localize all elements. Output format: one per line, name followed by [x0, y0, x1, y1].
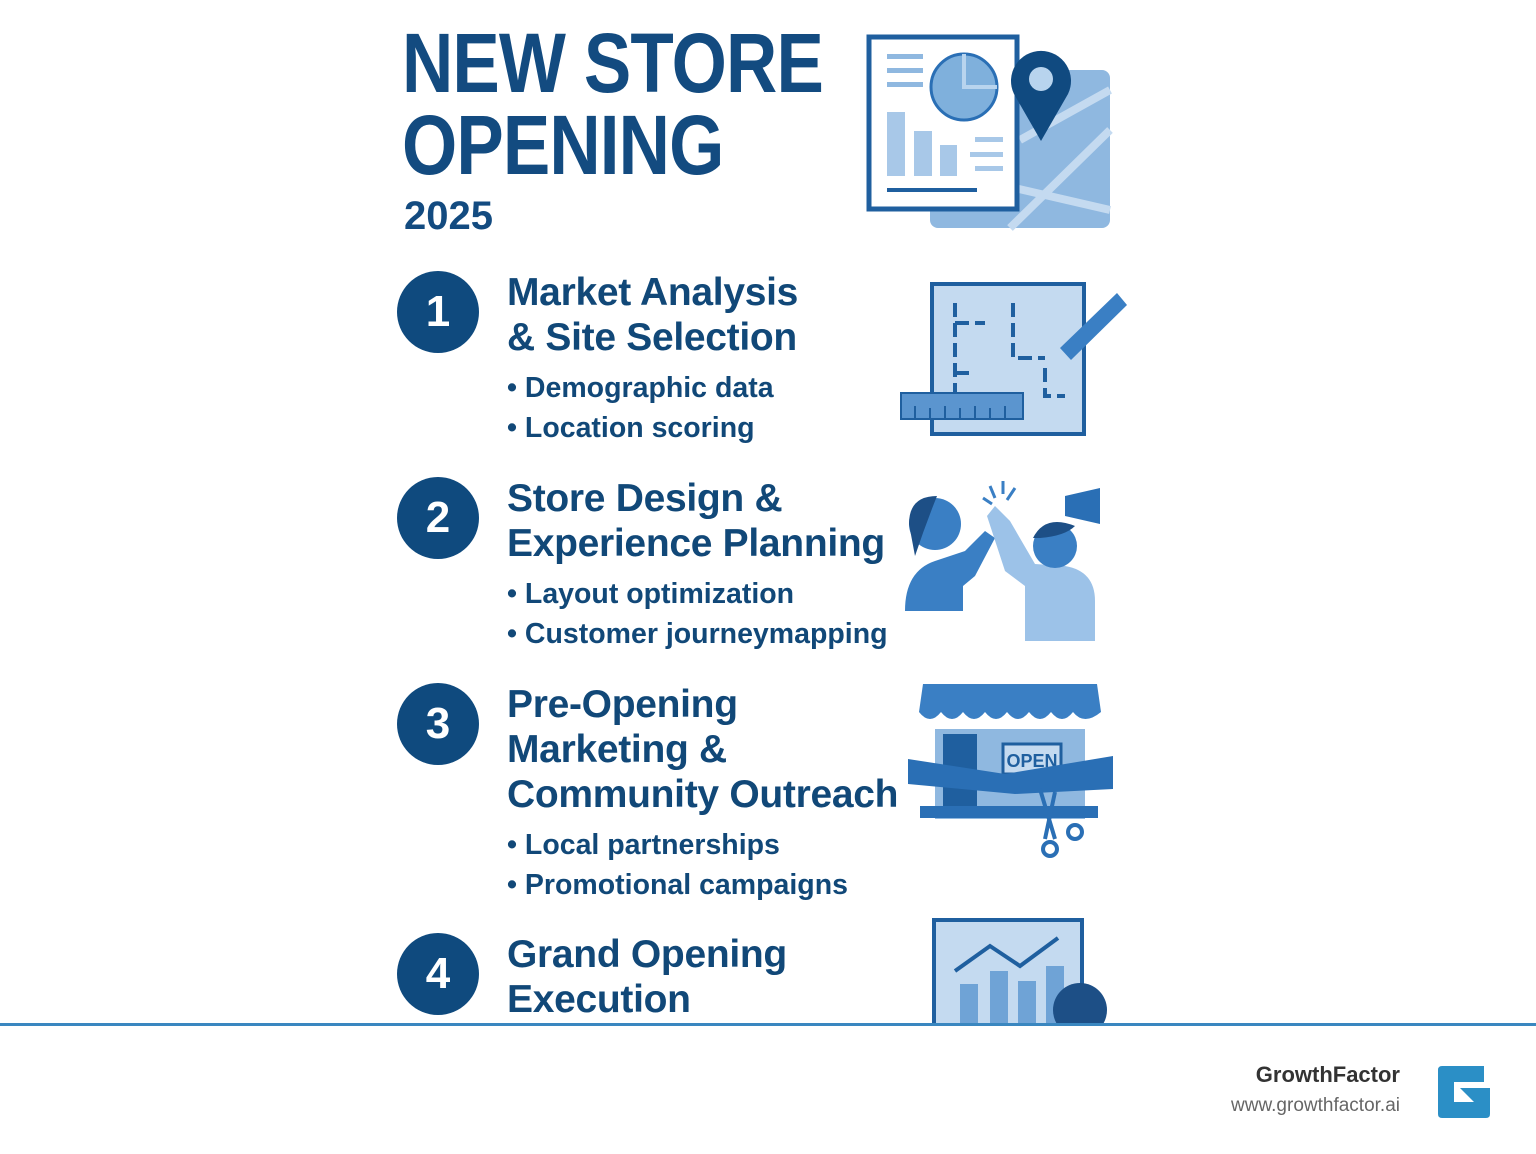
number badge 3 [397, 683, 479, 765]
step 1 [397, 271, 1127, 444]
icon: open store: OPEN [1006, 751, 1058, 771]
title: OPENING [402, 98, 723, 192]
number badge 1 [397, 271, 479, 353]
step 3 [397, 683, 1113, 901]
logo G [1438, 1066, 1490, 1118]
title [402, 16, 823, 192]
footer brand: GrowthFactor [1256, 1062, 1400, 1087]
icon: report and map [866, 34, 1113, 231]
step 1 text: Market Analysis [507, 271, 798, 314]
number badge 1: 1 [426, 287, 450, 336]
footer brand: www.growthfactor.ai [1231, 1095, 1400, 1116]
step 3 text: Promotional campaigns [525, 869, 848, 901]
step 1 text: & Site Selection [507, 316, 797, 359]
footer brand [1231, 1062, 1400, 1116]
step 4 text [507, 933, 787, 1021]
step 3 text [507, 683, 898, 901]
icon: high five [905, 481, 1100, 641]
step 2 text: Layout optimization [525, 578, 794, 610]
step 2 text [507, 477, 888, 650]
step 2 text: Store Design & [507, 477, 782, 520]
number badge 2 [397, 477, 479, 559]
title: NEW STORE [402, 16, 823, 110]
number badge 2: 2 [426, 493, 450, 542]
step 4 [397, 918, 1107, 1023]
step 2 text: Experience Planning [507, 522, 885, 565]
number badge 3: 3 [426, 699, 450, 748]
step 1 text: Demographic data [525, 372, 774, 404]
step 2 text: Customer journeymapping [525, 618, 888, 650]
step 3 text: Community Outreach [507, 773, 898, 816]
icon: open store [908, 684, 1113, 858]
icon: floor plan [900, 282, 1127, 436]
step 4 text: Execution [507, 978, 691, 1021]
step 4 text: Grand Opening [507, 933, 787, 976]
number badge 4 [397, 933, 479, 1015]
step 2 [397, 477, 1100, 650]
step 3 text: Pre-Opening [507, 683, 738, 726]
step 3 text: Local partnerships [525, 829, 780, 861]
number badge 4: 4 [426, 949, 450, 998]
step 3 text: Marketing & [507, 728, 727, 771]
year: 2025 [404, 194, 493, 238]
step 1 text [507, 271, 798, 444]
step 1 text: Location scoring [525, 412, 755, 444]
divider line [0, 1023, 1536, 1026]
icon: growth chart [932, 918, 1107, 1023]
